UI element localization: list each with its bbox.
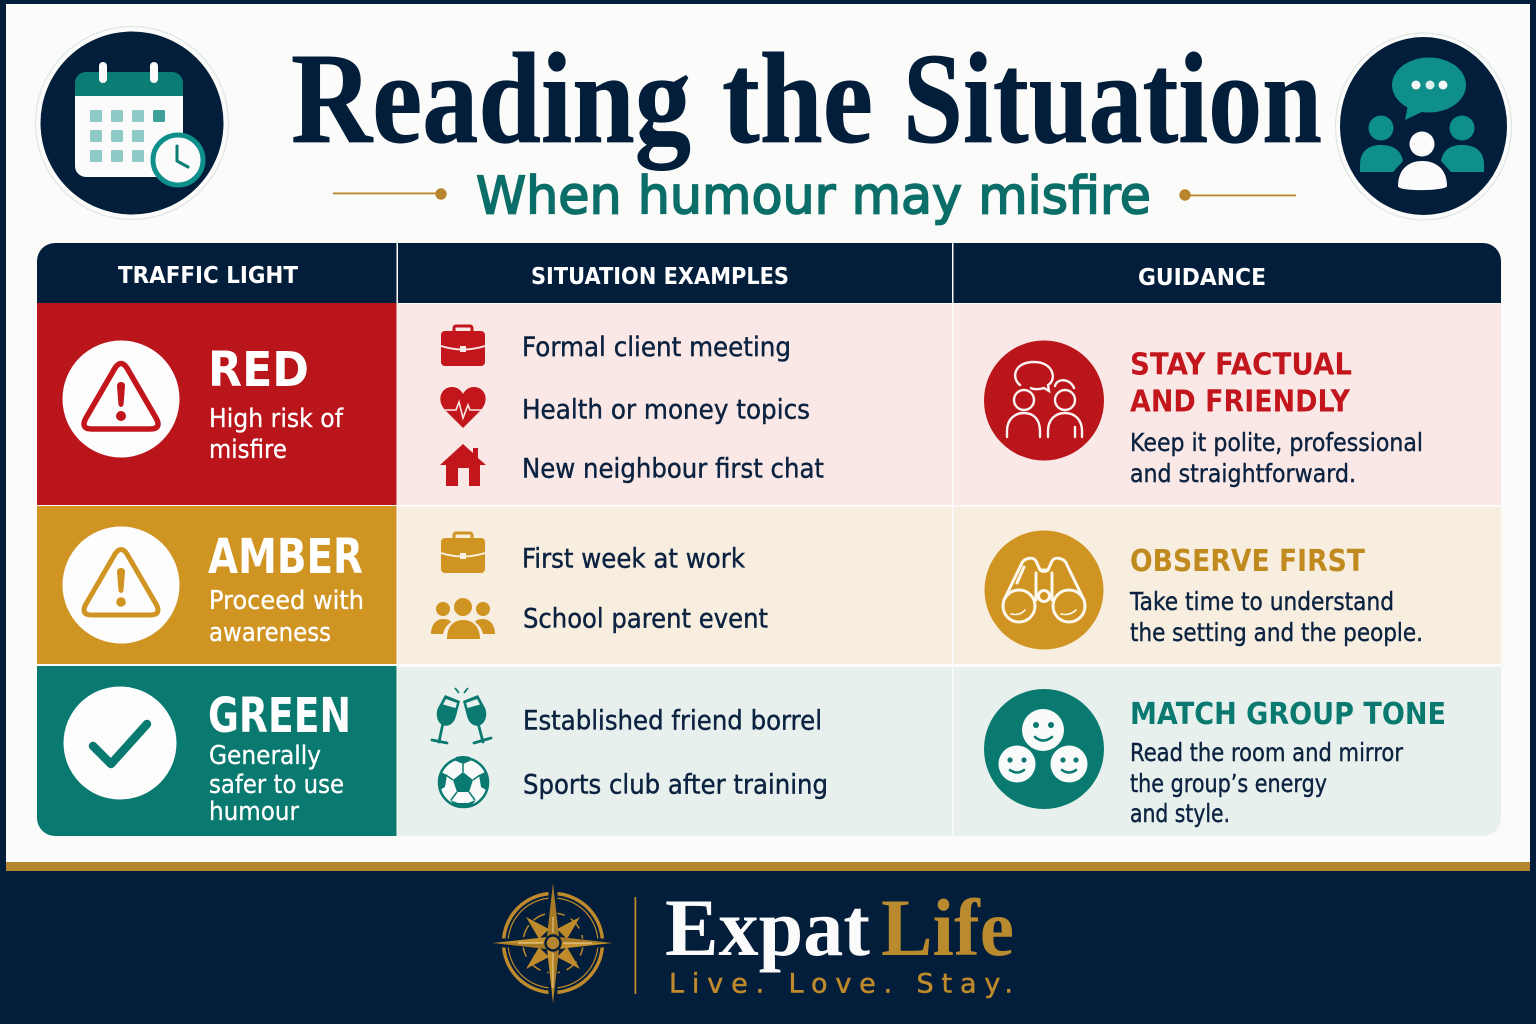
example: new neighbour first chat: New neighbour first chat [522, 454, 824, 484]
red row label [62, 340, 344, 465]
guidance: stay factual: Keep it polite, professional [1130, 428, 1423, 457]
example: health or money topics [440, 387, 810, 428]
example: first week at work [441, 533, 745, 574]
column headers: SITUATION EXAMPLES [531, 264, 789, 290]
example: established friend borrel [432, 688, 822, 743]
example: sports club after training: Sports club after training [523, 770, 828, 800]
red row label: misfire [209, 435, 287, 465]
example: first week at work: First week at work [522, 544, 745, 574]
title [291, 27, 1322, 171]
column headers [118, 263, 1266, 291]
guidance: stay factual: AND FRIENDLY [1130, 384, 1351, 420]
subtitle: When humour may misfire [476, 166, 1151, 226]
example: formal client meeting: Formal client meeting [522, 332, 791, 363]
title: Reading [291, 27, 691, 171]
guidance: observe first: OBSERVE FIRST [1130, 544, 1365, 579]
guidance: observe first: Take time to understand [1129, 587, 1394, 616]
guidance: stay factual: and straightforward. [1130, 459, 1356, 488]
logo: compass [493, 884, 612, 1003]
logo: wordmark: Live. Love. Stay. [669, 968, 1013, 1000]
example: sports club after training [439, 756, 828, 807]
example: school parent event [431, 598, 768, 639]
footer band [6, 862, 1530, 871]
example: established friend borrel: Established friend borrel [523, 706, 822, 736]
amber row label: awareness [209, 618, 331, 648]
red row label: RED [208, 342, 309, 398]
amber row label [62, 526, 364, 648]
guidance: match group tone: and style. [1130, 799, 1230, 828]
guidance: match group tone: Read the room and mirror [1130, 738, 1404, 767]
example: formal client meeting [441, 326, 791, 366]
green row label: GREEN [208, 688, 351, 744]
amber row label: AMBER [208, 529, 363, 585]
title: Situation [903, 27, 1322, 171]
amber row label: Proceed with [209, 586, 364, 616]
guidance: observe first: the setting and the people. [1130, 618, 1423, 647]
logo divider [634, 897, 636, 994]
example: new neighbour first chat [440, 444, 824, 486]
column headers: GUIDANCE [1138, 265, 1266, 291]
logo: wordmark: Life [881, 882, 1014, 973]
icon: calendar and clock [36, 26, 228, 220]
red row label: High risk of [209, 404, 344, 434]
example: health or money topics: Health or money topics [522, 394, 810, 426]
guidance: stay factual [984, 340, 1423, 488]
title: the [722, 27, 873, 171]
green row label: Generally [209, 741, 321, 771]
guidance: stay factual: STAY FACTUAL [1130, 348, 1352, 382]
logo: wordmark: Expat [665, 882, 870, 973]
guidance: observe first [984, 530, 1423, 650]
guidance: match group tone: the group’s energy [1130, 769, 1327, 798]
icon: group conversation [1336, 33, 1512, 220]
green row label: humour [209, 797, 299, 827]
green row label [64, 686, 351, 827]
table [37, 243, 1501, 836]
guidance: match group tone [984, 689, 1446, 828]
guidance: match group tone: MATCH GROUP TONE [1130, 697, 1446, 732]
logo: wordmark [665, 882, 1014, 1000]
example: school parent event: School parent event [523, 604, 768, 634]
column headers: TRAFFIC LIGHT [118, 263, 298, 289]
green row label: safer to use [209, 770, 344, 800]
